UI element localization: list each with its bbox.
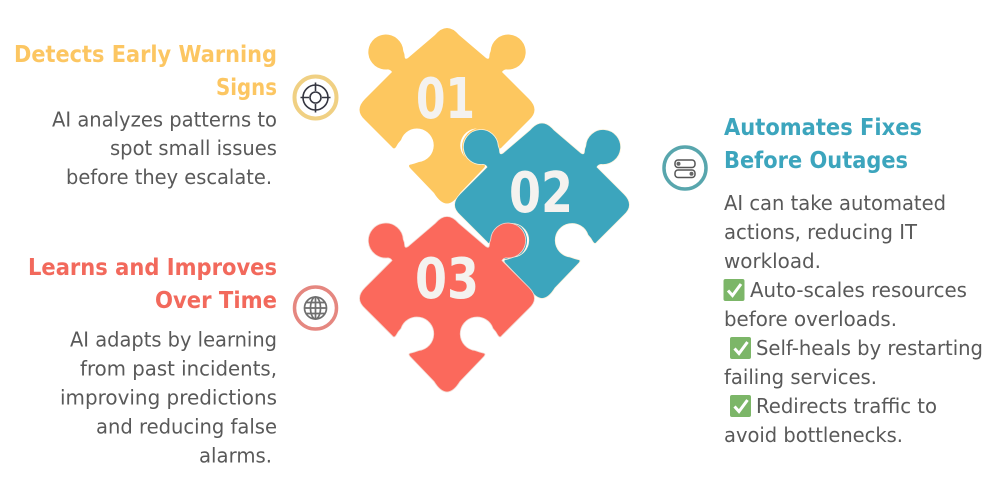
panel: automates fixes before outages xyxy=(724,113,983,447)
check item: redirects: avoid bottlenecks. xyxy=(724,423,903,447)
text: automates description xyxy=(724,191,946,273)
text: detects description: AI analyzes patterns to xyxy=(52,108,277,132)
text: detects description: before they escalate. xyxy=(66,165,272,189)
text: detects description xyxy=(52,108,277,189)
heading: learns and improves: Learns and Improves xyxy=(28,253,277,281)
check item: auto-scales xyxy=(724,278,967,331)
check item: auto-scales: Auto-scales resources xyxy=(750,278,967,302)
heading: detects early warning signs xyxy=(14,40,277,101)
text: learns description: alarms. xyxy=(199,444,272,468)
check item: self-heals: Self-heals by restarting xyxy=(756,336,983,360)
heading: learns and improves: Over Time xyxy=(155,286,277,314)
puzzle piece 02: teal xyxy=(454,123,630,298)
heading: automates fixes: Before Outages xyxy=(724,146,908,174)
check item: self-heals xyxy=(724,336,983,389)
text: automates description: workload. xyxy=(724,249,821,273)
text: automates description: AI can take automated xyxy=(724,191,946,215)
number 01: 01 xyxy=(416,67,475,132)
text: learns description: improving predictions xyxy=(60,386,277,410)
panel: learns and improves over time xyxy=(28,253,277,468)
text: learns description: from past incidents, xyxy=(80,356,277,380)
text: detects description: spot small issues xyxy=(110,136,277,160)
heading: learns and improves xyxy=(28,253,277,314)
text: learns description: and reducing false xyxy=(96,414,277,438)
icon: globe xyxy=(294,287,336,329)
puzzle piece 01: yellow xyxy=(360,28,534,204)
check item: self-heals: failing services. xyxy=(724,365,877,389)
text: automates description: actions, reducing IT xyxy=(724,220,917,244)
number 02: 02 xyxy=(509,161,573,226)
heading: detects early warning signs: Signs xyxy=(216,73,277,101)
heading: automates fixes xyxy=(724,113,922,174)
icon: server toggles xyxy=(664,147,706,189)
check item: redirects: Redirects traffic to xyxy=(756,394,937,418)
number 03: 03 xyxy=(415,247,479,312)
check item: auto-scales: before overloads. xyxy=(724,307,897,331)
heading: detects early warning signs: Detects Early Warning xyxy=(14,40,277,68)
text: learns description: AI adapts by learning xyxy=(70,328,277,352)
icon: target crosshair xyxy=(294,76,336,118)
panel: detects early warning signs xyxy=(14,40,277,189)
puzzle piece 03: red xyxy=(360,216,534,392)
check item: redirects xyxy=(724,394,937,447)
text: learns description xyxy=(60,328,277,468)
heading: automates fixes: Automates Fixes xyxy=(724,113,922,141)
